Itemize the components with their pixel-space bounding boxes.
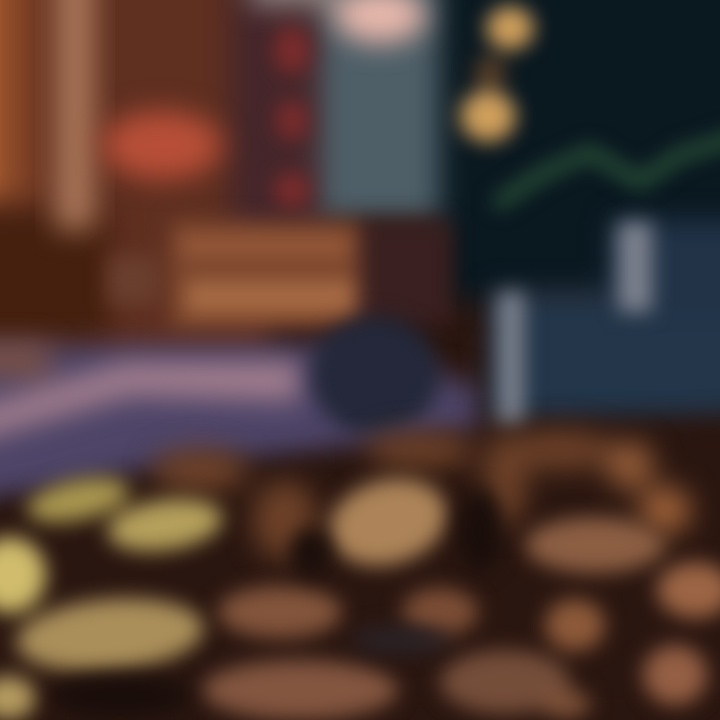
pale vertical bars [498, 222, 652, 432]
red column dots [274, 26, 310, 208]
wooden crate [108, 220, 452, 330]
tan coins [202, 466, 720, 720]
yellow coins [0, 470, 226, 720]
dark sphere [311, 315, 439, 435]
background walls [0, 0, 720, 360]
green line chart [495, 130, 720, 205]
blue-grey bars on the right [490, 220, 720, 420]
mid brown coins in the back [152, 430, 691, 560]
gold lights [460, 6, 534, 142]
dark coin pile base [0, 420, 720, 720]
pale vertical stripe [55, 0, 95, 230]
purple floor [0, 345, 480, 505]
orange glow at left edge [0, 0, 110, 350]
dark gaps between coins [50, 488, 502, 718]
white and pink top highlight [250, 0, 426, 43]
pink floor band [0, 345, 300, 450]
red blob [102, 111, 222, 179]
